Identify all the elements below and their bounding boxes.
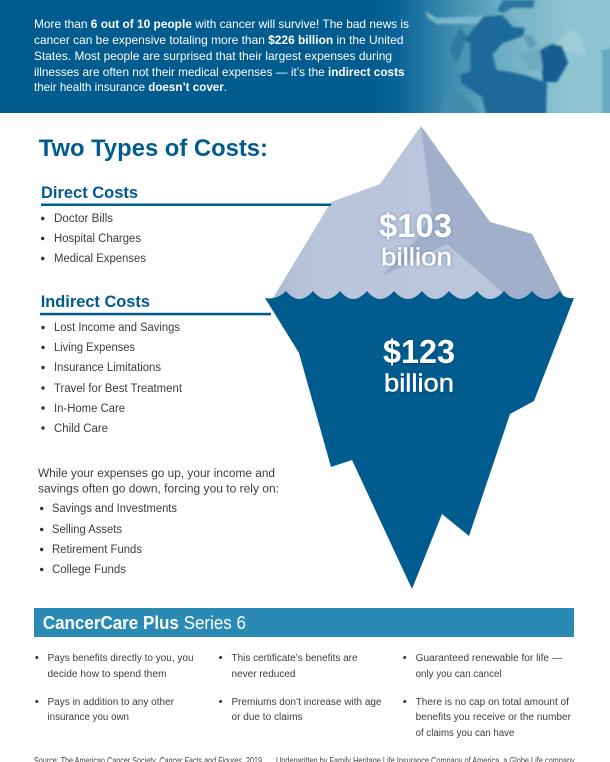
benefits column 3: benefits you receive or the number [416, 712, 572, 723]
benefits column 3 [403, 653, 572, 739]
direct costs list: Hospital Charges [54, 233, 141, 245]
benefits column 3: Guaranteed renewable for life — [416, 653, 562, 664]
header text: More than 6 out of 10 people with cancer will survive! The bad news is [34, 18, 409, 31]
header text: their health insurance doesn’t cover. [34, 81, 227, 94]
benefits column 2: or due to claims [232, 712, 302, 723]
header photo: parent lifting child [425, 0, 610, 118]
figure: $103 billion: $103 [379, 207, 452, 244]
benefits column 2: Premiums don’t increase with age [232, 697, 382, 708]
indirect costs list [41, 322, 183, 435]
paragraph: income goes down [38, 468, 279, 496]
direct costs list [41, 213, 146, 265]
product banner: CancerCare Plus Series 6 [43, 613, 246, 633]
benefits column 3: of claims you can have [416, 728, 515, 739]
list: funds to rely on: College Funds [52, 564, 126, 576]
benefits column 3: There is no cap on total amount of [416, 697, 569, 708]
figure: $123 billion: billion [384, 370, 454, 398]
list: funds to rely on [40, 503, 177, 576]
benefits column 1: Pays in addition to any other [48, 697, 175, 708]
indirect costs heading: Indirect Costs [41, 292, 150, 311]
header text [34, 18, 409, 94]
direct costs [41, 183, 331, 265]
iceberg above water [273, 126, 564, 304]
indirect costs list: Living Expenses [54, 342, 135, 354]
figure: $103 billion [379, 207, 452, 272]
indirect costs list: Child Care [54, 423, 108, 435]
list: funds to rely on: Selling Assets [52, 524, 122, 536]
indirect costs list: In-Home Care [54, 403, 125, 415]
benefits column 1 [35, 653, 193, 723]
benefits column 2 [219, 653, 382, 723]
indirect costs [40, 292, 271, 435]
iceberg [265, 126, 574, 589]
indirect costs list: Travel for Best Treatment [54, 383, 183, 395]
direct costs list: Medical Expenses [54, 253, 146, 265]
benefits column 3: only you can cancel [416, 669, 502, 680]
title: Two Types of Costs: [39, 135, 268, 162]
header text: cancer can be expensive totaling more than $226 billion in the United [34, 34, 403, 47]
list: funds to rely on: Retirement Funds [52, 544, 142, 556]
benefits column 1: decide how to spend them [48, 669, 166, 680]
direct costs list: Doctor Bills [54, 213, 113, 225]
indirect costs list: Insurance Limitations [54, 362, 161, 374]
figure: $123 billion: $123 [383, 333, 455, 370]
iceberg below water [265, 291, 574, 589]
indirect costs list: Lost Income and Savings [54, 322, 180, 334]
header banner [0, 0, 610, 118]
header text: illnesses are often not their medical expenses — it’s the indirect costs [34, 66, 405, 79]
product banner [34, 608, 574, 637]
benefits column 1: insurance you own [48, 712, 129, 723]
paragraph: income goes down: savings often go down, forcing you to rely on: [38, 484, 279, 496]
header text: States. Most people are surprised that their largest expenses during [34, 50, 392, 63]
paragraph: income goes down: While your expenses go up, your income and [38, 468, 275, 480]
benefits column 2: This certificate’s benefits are [232, 653, 358, 664]
direct costs heading: Direct Costs [41, 183, 138, 202]
benefits column 1: Pays benefits directly to you, you [48, 653, 194, 664]
figure: $103 billion: billion [381, 244, 452, 272]
list: funds to rely on: Savings and Investments [52, 503, 177, 515]
benefits column 2: never reduced [232, 669, 296, 680]
figure: $123 billion [383, 333, 455, 398]
